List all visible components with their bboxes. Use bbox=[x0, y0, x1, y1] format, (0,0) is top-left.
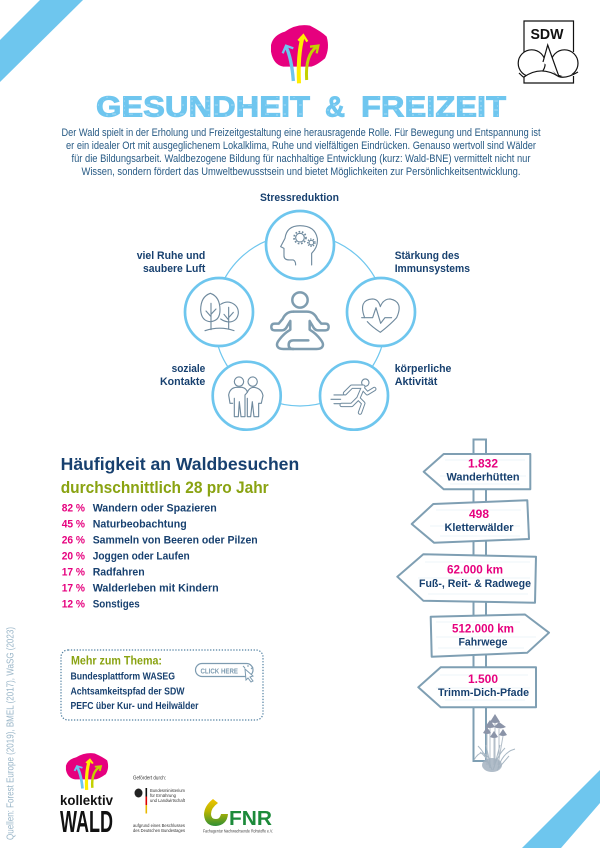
sign: Fahrwege: 512.000 km bbox=[452, 624, 514, 636]
subheading: durchschnittlich 28 pro Jahr: durchschnittlich 28 pro Jahr bbox=[61, 479, 269, 497]
link list bbox=[70, 672, 199, 712]
label: viel Ruhe und saubere Luft bbox=[137, 250, 206, 275]
heading: Häufigkeit an Waldbesuchen: Häufigkeit an Waldbesuchen bbox=[61, 454, 299, 474]
logo: BMEL funding note: des Deutschen Bundestages bbox=[133, 828, 186, 834]
logo: SDW: SDW bbox=[530, 27, 564, 43]
decorative corner stripe: top left bbox=[0, 0, 83, 82]
logo: BMEL funding note: Gefördert durch: bbox=[133, 776, 166, 782]
intro text block: Der Wald spielt in der Erholung und Freizeitgestaltung eine herausragende Rolle. Für Bewegung und Entspannung ist bbox=[62, 127, 541, 139]
title bbox=[96, 92, 506, 124]
icon: trees bbox=[185, 278, 253, 346]
label: körperliche Aktivität bbox=[395, 363, 451, 388]
label: körperliche Aktivität: Aktivität bbox=[395, 376, 438, 388]
logo: BMEL funding note: Bundesministerium bbox=[150, 788, 185, 793]
list: forest visit activities: 17 % bbox=[62, 583, 85, 595]
intro text block bbox=[62, 127, 541, 178]
title: GESUNDHEIT bbox=[96, 92, 310, 124]
label: Stärkung des Immunsystems: Immunsystems bbox=[395, 263, 470, 275]
icon: stress reduction head with gears bbox=[266, 211, 334, 279]
icon: meditating person bbox=[271, 292, 329, 349]
sign: Fahrwege: Fahrwege bbox=[458, 636, 508, 648]
logo: Kollektiv Wald bbox=[60, 753, 113, 839]
list: forest visit activities: Walderleben mit Kindern bbox=[93, 583, 219, 595]
label: viel Ruhe und saubere Luft: saubere Luft bbox=[143, 263, 206, 275]
logo: FNR bbox=[203, 799, 273, 834]
label: körperliche Aktivität: körperliche bbox=[395, 363, 451, 375]
sign: Trimm-Dich-Pfade: 1.500 bbox=[468, 674, 498, 686]
sign: Kletterwälder bbox=[412, 500, 529, 543]
sign: Fuß-, Reit- & Radwege: Fuß-, Reit- & Radwege bbox=[419, 578, 531, 590]
label: soziale Kontakte: soziale bbox=[172, 363, 205, 375]
list: forest visit activities: Wandern oder Spazieren bbox=[93, 503, 217, 515]
title: & bbox=[325, 92, 345, 124]
sources note: Quellen: Forest Europe (2019), BMEL (2017), WaSG (2023) bbox=[4, 627, 16, 840]
link list: Achtsamkeitspfad der SDW bbox=[70, 686, 185, 698]
list: forest visit activities: Joggen oder Laufen bbox=[93, 551, 190, 563]
logo: BMEL funding note: und Landwirtschaft bbox=[150, 798, 186, 803]
sign: Fuß-, Reit- & Radwege: 62.000 km bbox=[447, 565, 503, 577]
label: Stärkung des Immunsystems: Stärkung des bbox=[395, 250, 459, 262]
post bbox=[474, 440, 486, 761]
logo: Kollektiv Wald: WALD bbox=[60, 804, 113, 839]
decorative corner stripe: bottom right bbox=[522, 770, 600, 848]
list: forest visit activities: 12 % bbox=[62, 599, 85, 611]
list: forest visit activities: Sammeln von Beeren oder Pilzen bbox=[93, 535, 258, 547]
list: forest visit activities: Sonstiges bbox=[93, 599, 140, 611]
sign: Fahrwege bbox=[431, 614, 549, 657]
logo: BMEL funding note: für Ernährung bbox=[150, 793, 176, 798]
icon: runner bbox=[320, 362, 388, 430]
button: click here: CLICK HERE bbox=[200, 666, 238, 676]
benefits diagram bbox=[137, 192, 470, 430]
link list: Bundesplattform WASEG bbox=[70, 672, 175, 682]
intro text block: für die Bildungsarbeit. Waldbezogene Bildung für nachhaltige Entwicklung (kurz: Wald-BNE) vermittelt nicht nur bbox=[72, 153, 531, 165]
intro text block: er ein idealer Ort mit ausgeglichenem Lokalklima, Ruhe und vielfältigen Eindrücken. Genauso wertvoll sind Wälder bbox=[66, 140, 536, 152]
label: soziale Kontakte: Kontakte bbox=[160, 376, 205, 388]
panel: further links bbox=[61, 650, 263, 720]
list: forest visit activities: 20 % bbox=[62, 551, 85, 563]
list: forest visit activities: 82 % bbox=[62, 503, 85, 515]
list: forest visit activities: Radfahren bbox=[93, 567, 145, 579]
sign: Wanderhütten: 1.832 bbox=[468, 459, 498, 471]
sign: Wanderhütten bbox=[424, 454, 530, 489]
list: forest visit activities: 45 % bbox=[62, 519, 85, 531]
link list: PEFC über Kur- und Heilwälder bbox=[70, 701, 199, 712]
list: forest visit activities bbox=[62, 503, 258, 611]
logo: Kollektiv Wald tree, top bbox=[271, 25, 328, 83]
label: Stärkung des Immunsystems bbox=[395, 250, 470, 275]
sign: Kletterwälder: 498 bbox=[469, 509, 490, 521]
logo: SDW bbox=[518, 21, 578, 90]
sign: Fuß-, Reit- & Radwege bbox=[397, 554, 536, 603]
logo: BMEL funding note: aufgrund eines Beschlusses bbox=[133, 823, 186, 829]
sign: Trimm-Dich-Pfade: Trimm-Dich-Pfade bbox=[438, 687, 529, 699]
sign: Wanderhütten: Wanderhütten bbox=[446, 472, 520, 484]
label: Stressreduktion: Stressreduktion bbox=[260, 192, 339, 204]
logo: Kollektiv Wald: kollektiv bbox=[60, 792, 113, 808]
list: forest visit activities: Naturbeobachtung bbox=[93, 519, 187, 531]
button: click here bbox=[196, 664, 253, 682]
list: forest visit activities: 26 % bbox=[62, 535, 85, 547]
heading: Mehr zum Thema: Mehr zum Thema: bbox=[71, 654, 162, 668]
icon: immune system heart bbox=[347, 278, 415, 346]
logo: BMEL funding note bbox=[133, 776, 186, 834]
signpost bbox=[397, 440, 549, 772]
title: FREIZEIT bbox=[361, 92, 506, 124]
sign: Trimm-Dich-Pfade bbox=[418, 667, 536, 707]
logo: FNR: FNR bbox=[229, 807, 272, 830]
list: forest visit activities: 17 % bbox=[62, 567, 85, 579]
label: viel Ruhe und saubere Luft: viel Ruhe und bbox=[137, 250, 205, 262]
icon: two people bbox=[213, 362, 281, 430]
logo: FNR: Fachagentur Nachwachsende Rohstoffe e.V. bbox=[203, 828, 273, 834]
intro text block: Wissen, sondern fördert das Umweltbewusstsein und bietet Möglichkeiten zur Persönlichkeitsentwicklung. bbox=[82, 166, 520, 178]
sign: Kletterwälder: Kletterwälder bbox=[444, 522, 514, 534]
connecting ring bbox=[214, 234, 386, 406]
illustration: mushrooms and grass bbox=[474, 714, 515, 772]
label: soziale Kontakte bbox=[160, 363, 205, 388]
